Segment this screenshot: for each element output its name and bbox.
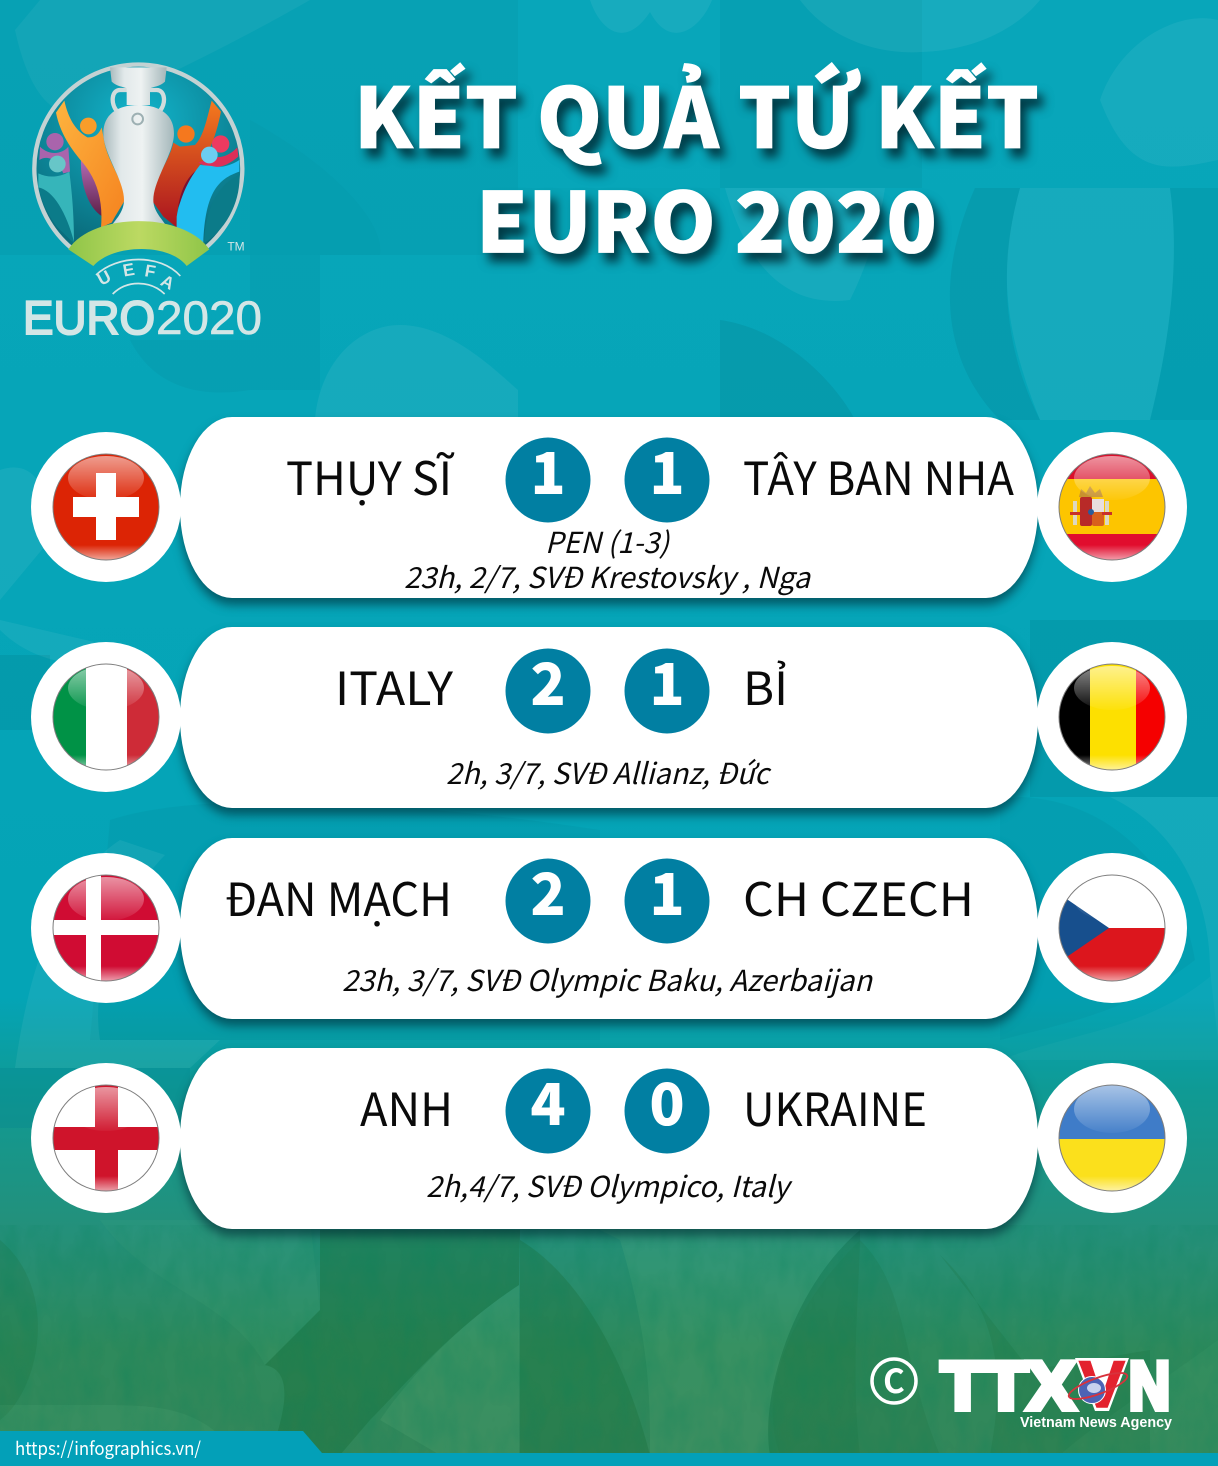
globe icon xyxy=(1066,1368,1130,1404)
icon: copyright: C xyxy=(883,1355,905,1403)
match 4 home team: ANH xyxy=(360,1074,453,1140)
match 3 home team: ĐAN MẠCH xyxy=(225,864,452,930)
grass texture xyxy=(0,1225,1218,1455)
match 2 details: 2h, 3/7, SVĐ Allianz, Đức xyxy=(446,751,772,793)
EURO2020 wordmark xyxy=(23,291,262,344)
match 1 away score: 1 xyxy=(649,427,685,511)
match 1 home score: 1 xyxy=(530,427,566,511)
match 1 left flag: Switzerland xyxy=(31,432,181,582)
panel: match 3 Đan Mạch vs CH Czech xyxy=(31,838,1187,1019)
footer URL: https://infographics.vn/ xyxy=(15,1435,201,1461)
match 1 pill xyxy=(180,417,1038,598)
match 3 away score xyxy=(624,848,710,944)
match 2 away score: 1 xyxy=(649,638,685,722)
match 1 away score xyxy=(624,427,710,522)
match 1 details: 23h, 2/7, SVĐ Krestovsky , Nga xyxy=(404,555,812,597)
UEFA lettering: A xyxy=(157,270,178,294)
UEFA Euro 2020 logo xyxy=(34,65,245,294)
match 2 away score xyxy=(624,638,710,734)
match 1 right flag: Spain xyxy=(1037,432,1187,582)
TTXVN logo xyxy=(941,1347,1172,1431)
match 3 away team: CH CZECH xyxy=(743,864,974,930)
footer band xyxy=(0,1431,1218,1466)
darker green bands xyxy=(0,1230,1150,1455)
match 3 home score: 2 xyxy=(530,848,566,932)
match 4 left flag: England xyxy=(31,1063,181,1213)
match 3 left flag: Denmark xyxy=(31,853,181,1003)
UEFA arcs xyxy=(96,259,180,294)
panel: match 1 Thụy Sĩ vs Tây Ban Nha xyxy=(31,417,1187,598)
match 2 right flag: Belgium xyxy=(1037,642,1187,792)
match 4 home score xyxy=(506,1058,590,1154)
V letter: V xyxy=(1079,1347,1125,1421)
match 2 home score: 2 xyxy=(530,638,566,722)
match 1 home team: THỤY SĨ xyxy=(286,443,454,509)
trophy xyxy=(103,67,174,224)
match 4 pill xyxy=(180,1048,1038,1229)
icon: copyright xyxy=(872,1355,916,1403)
lighter teal swirls xyxy=(0,0,1218,1068)
match 2 left flag: Italy xyxy=(31,642,181,792)
match 2 home score xyxy=(506,638,590,734)
match 3 home score xyxy=(506,848,590,944)
panel: match 4 Anh vs Ukraine xyxy=(31,1048,1187,1229)
match 2 home team: ITALY xyxy=(335,653,454,719)
match 4 away score xyxy=(624,1058,710,1154)
UEFA lettering: U xyxy=(94,266,114,290)
agency name: Vietnam News Agency xyxy=(1020,1415,1172,1431)
match 4 away team: UKRAINE xyxy=(743,1074,927,1140)
match 2 pill xyxy=(180,627,1038,808)
match 4 right flag: Ukraine xyxy=(1037,1063,1187,1213)
UEFA lettering: F xyxy=(143,260,157,282)
match 3 right flag: Czech Republic xyxy=(1037,853,1187,1003)
match 3 details: 23h, 3/7, SVĐ Olympic Baku, Azerbaijan xyxy=(342,958,873,1000)
EURO2020 wordmark: EURO xyxy=(23,291,155,344)
match 4 details: 2h,4/7, SVĐ Olympico, Italy xyxy=(426,1164,793,1206)
panel: match 2 Italy vs Bỉ xyxy=(31,627,1187,808)
match 3 pill xyxy=(180,838,1038,1019)
N letter: N xyxy=(1129,1348,1170,1424)
lighter green figures xyxy=(0,1220,1218,1455)
match 4 away score: 0 xyxy=(649,1058,685,1142)
match 2 away team: BỈ xyxy=(743,653,788,719)
title: EURO 2020 xyxy=(476,156,937,276)
EURO2020 wordmark: 2020 xyxy=(156,291,262,344)
match 4 home score: 4 xyxy=(530,1058,566,1142)
trademark: TM xyxy=(227,240,245,254)
UEFA lettering: E xyxy=(121,259,136,281)
TTX letters: TTX xyxy=(941,1348,1075,1424)
darker teal patches xyxy=(0,0,1218,1128)
green arc xyxy=(68,221,209,266)
title xyxy=(354,52,1039,276)
match 1 away team: TÂY BAN NHA xyxy=(743,443,1014,509)
title: KẾT QUẢ TỨ KẾT xyxy=(354,52,1039,172)
logo figures xyxy=(38,101,239,243)
match 1 penalties: PEN (1-3) xyxy=(545,520,670,562)
logo disc and ring xyxy=(34,65,242,248)
match 3 away score: 1 xyxy=(649,848,685,932)
match 1 home score xyxy=(506,427,590,522)
